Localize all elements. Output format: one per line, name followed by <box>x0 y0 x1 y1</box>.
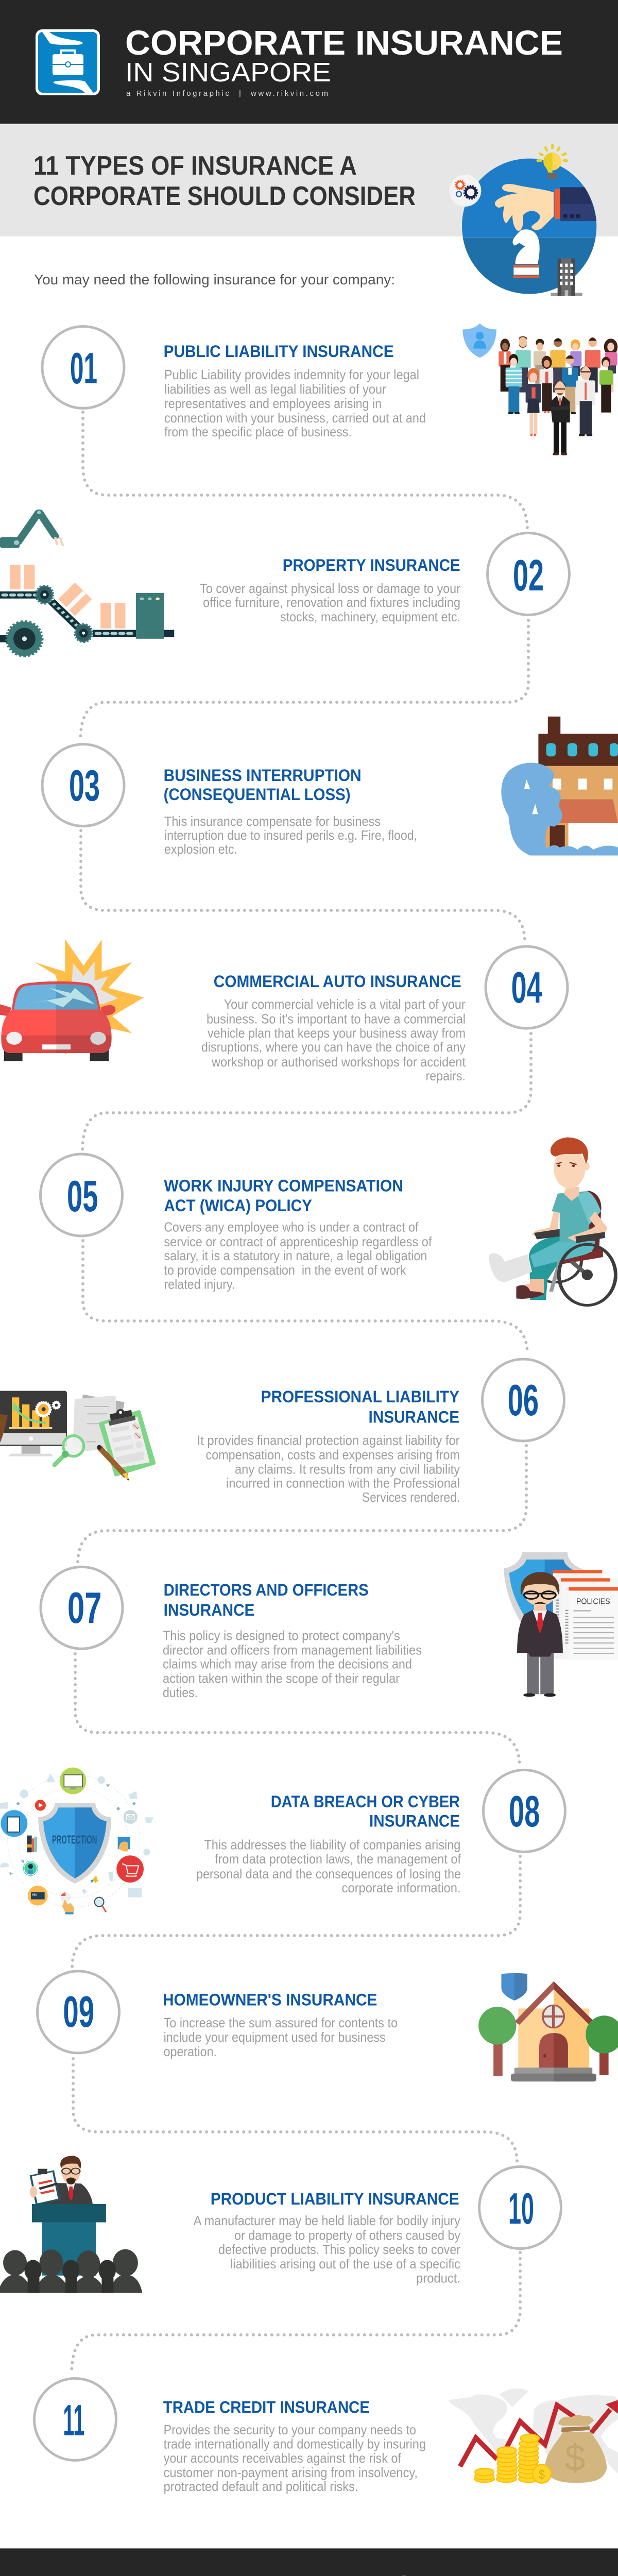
body 07: This policy is designed to protect company's <box>163 1628 400 1643</box>
heading 06 <box>261 1387 459 1426</box>
panel: 01 public liability <box>42 323 617 455</box>
body 11: customer non-payment arising from insolvency, <box>164 2465 418 2480</box>
number badge 08 <box>483 1770 565 1852</box>
body 01 <box>164 367 426 439</box>
body 05: salary, it is a statutory in nature, a legal obligation <box>164 1248 427 1263</box>
heading <box>33 151 416 211</box>
body 05: to provide compensation in the event of work <box>164 1262 406 1278</box>
number badge 09: 09 <box>63 1988 94 2037</box>
body 04: Your commercial vehicle is a vital part of your <box>224 996 466 1012</box>
heading 07: DIRECTORS AND OFFICERS <box>164 1581 369 1599</box>
body 06: It provides financial protection against liability for <box>197 1432 460 1448</box>
body 03 <box>164 814 417 857</box>
heading 01: PUBLIC LIABILITY INSURANCE <box>164 342 394 361</box>
body 08 <box>196 1837 461 1895</box>
icon: logo hands and briefcase <box>36 29 100 95</box>
body 11: protracted default and political risks. <box>164 2479 358 2494</box>
body 06: incurred in connection with the Professional <box>226 1476 460 1491</box>
number badge 07: 07 <box>67 1584 101 1633</box>
gold coins <box>474 2434 551 2483</box>
number badge 02: 02 <box>513 551 544 600</box>
number badge 04 <box>486 946 568 1028</box>
panel: 09 homeowner's <box>37 1971 618 2081</box>
title: IN SINGAPORE <box>125 58 331 88</box>
body 09: operation. <box>164 2044 217 2059</box>
body 06: Services rendered. <box>362 1489 460 1505</box>
cart <box>116 1855 144 1883</box>
heading 11: TRADE CREDIT INSURANCE <box>163 2398 370 2417</box>
hand <box>495 184 554 231</box>
dotted connecting path <box>72 412 531 2375</box>
heading 02: PROPERTY INSURANCE <box>283 556 460 574</box>
number badge 01 <box>42 327 124 408</box>
body 09 <box>164 2015 398 2059</box>
body 04: business. So it's important to have a commercial <box>207 1011 466 1026</box>
body 03: This insurance compensate for business <box>164 814 381 829</box>
body 08: from data protection laws, the management of <box>215 1851 461 1867</box>
body 06: any claims. It results from any civil liability <box>235 1462 460 1477</box>
heading 08 <box>271 1792 460 1830</box>
heading 10: PRODUCT LIABILITY INSURANCE <box>211 2190 459 2208</box>
icon: officer with shield and policies <box>504 1552 618 1697</box>
body 10: product. <box>416 2270 460 2286</box>
body 10: defective products. This policy seeks to cover <box>218 2242 460 2257</box>
body 10: A manufacturer may be held liable for bodily injury <box>194 2213 460 2228</box>
panel: 10 product liability <box>0 2156 561 2293</box>
body 07 <box>163 1628 422 1700</box>
front rows <box>506 354 613 455</box>
number badge 05: 05 <box>67 1172 98 1221</box>
number badge 10 <box>479 2167 561 2248</box>
body 01: Public Liability provides indemnity for your legal <box>164 367 419 382</box>
visa: VISA <box>32 1893 37 1896</box>
body 01: representatives and employees arising in <box>164 396 382 411</box>
body 11: your accounts receivables against the risk of <box>164 2450 402 2466</box>
body 08: This addresses the liability of companies arising <box>204 1837 460 1853</box>
intro text: You may need the following insurance for your company: <box>34 272 395 287</box>
body 04: repairs. <box>425 1068 466 1083</box>
visa <box>28 1886 48 1906</box>
body 10: or damage to property of others caused by <box>234 2227 460 2243</box>
heading 03: BUSINESS INTERRUPTION <box>164 766 362 785</box>
heading 05: ACT (WICA) POLICY <box>164 1196 312 1215</box>
icon: strategy hand with chess knight <box>449 145 596 296</box>
heading 07: INSURANCE <box>164 1601 254 1619</box>
shield <box>38 1803 111 1884</box>
heading 06: PROFESSIONAL LIABILITY <box>261 1387 459 1406</box>
knight <box>512 229 540 264</box>
heading: CORPORATE SHOULD CONSIDER <box>33 181 416 211</box>
body 07: action taken within the scope of their regular <box>163 1670 400 1686</box>
icon: house with shield and trees <box>478 1973 618 2081</box>
panel: 08 data breach <box>0 1768 565 1914</box>
body 11 <box>164 2422 426 2494</box>
icon: protection shield with digital services: PROTECTION <box>52 1833 97 1846</box>
panel: 11 trade credit <box>34 2378 618 2494</box>
number badge 06: 06 <box>508 1376 539 1425</box>
number badge 01: 01 <box>70 344 97 393</box>
icon: crashed red car <box>0 939 144 1061</box>
icon: world map, rising graph and money <box>448 2388 618 2483</box>
number badge 06 <box>482 1359 564 1441</box>
number badge 03 <box>42 744 124 826</box>
heading 07 <box>164 1581 369 1619</box>
heading: 11 TYPES OF INSURANCE A <box>33 151 357 181</box>
body 11: Provides the security to your company needs to <box>164 2422 416 2437</box>
panel: 07 directors and officers <box>41 1552 618 1700</box>
body 02: office furniture, renovation and fixtures including <box>203 595 460 610</box>
heading 03: (CONSEQUENTIAL LOSS) <box>164 785 351 804</box>
monitor <box>60 1768 87 1794</box>
body 11: trade internationally and domestically by insuring <box>164 2436 426 2451</box>
number badge 03: 03 <box>69 761 100 810</box>
gears badge <box>449 175 481 207</box>
tablet <box>1 1810 27 1837</box>
icon: monitor, magnifier and clipboard <box>0 1391 154 1480</box>
body 07: director and officers from management liabilities <box>163 1642 422 1657</box>
body 06 <box>197 1432 460 1505</box>
heading 06: INSURANCE <box>369 1408 459 1426</box>
icon: protection shield with digital services <box>0 1768 153 1914</box>
body 09: include your equipment used for business <box>164 2029 386 2045</box>
body 03: explosion etc. <box>164 841 237 857</box>
body 08: personal data and the consequences of losing the <box>196 1866 461 1882</box>
heading 09: HOMEOWNER'S INSURANCE <box>163 1991 377 2009</box>
heading 03 <box>164 766 362 804</box>
body 02: stocks, machinery, equipment etc. <box>280 609 460 624</box>
money bag <box>545 2415 607 2483</box>
gold coins: $ <box>539 2468 545 2482</box>
body 04 <box>201 996 466 1083</box>
body 02: To cover against physical loss or damage to your <box>200 581 460 596</box>
heading 04: COMMERCIAL AUTO INSURANCE <box>214 972 461 991</box>
building <box>551 259 582 296</box>
heading 08: DATA BREACH OR CYBER <box>271 1792 460 1811</box>
number badge 11 <box>34 2378 116 2461</box>
body 03: interruption due to insured perils e.g. Fire, flood, <box>164 827 417 843</box>
back row <box>499 336 617 393</box>
body 07: claims which may arise from the decisions and <box>163 1656 412 1671</box>
title <box>125 24 563 98</box>
panel: 02 property <box>0 511 570 656</box>
body 10 <box>194 2213 460 2286</box>
bulb <box>538 145 567 179</box>
body 01: liabilities as well as legal liabilities of your <box>164 381 386 397</box>
body 06: compensation, costs and expenses arising from <box>206 1447 460 1463</box>
number badge 05 <box>40 1154 123 1236</box>
body 09: To increase the sum assured for contents to <box>164 2015 398 2030</box>
number badge 08: 08 <box>509 1787 540 1836</box>
body 01: from the specific place of business. <box>164 424 352 439</box>
body 08: corporate information. <box>342 1880 460 1895</box>
panel: 03 business interruption <box>42 717 618 857</box>
heading 08: INSURANCE <box>369 1811 460 1830</box>
number badge 07 <box>41 1567 123 1649</box>
heading 05 <box>164 1177 403 1215</box>
body 10: liabilities arising out of the use of a specific <box>230 2256 460 2272</box>
body 04: disruptions, where you can have the choice of any <box>201 1039 466 1055</box>
body 05: related injury. <box>164 1276 235 1292</box>
panel: 04 commercial auto <box>0 939 568 1083</box>
heading 05: WORK INJURY COMPENSATION <box>164 1177 403 1195</box>
title: CORPORATE INSURANCE <box>125 24 563 62</box>
body 04: vehicle plan that keeps your business away from <box>208 1025 466 1041</box>
header band <box>0 0 618 124</box>
number badge 11: 11 <box>63 2396 84 2445</box>
body 07: duties. <box>163 1685 198 1700</box>
number badge 09 <box>37 1971 119 2053</box>
body 04: workshop or authorised workshops for accident <box>211 1054 466 1070</box>
call to action panel <box>0 2548 618 2576</box>
number badge 04: 04 <box>511 963 542 1012</box>
number badge 02 <box>487 533 570 615</box>
icon: crowd of employees with shield <box>462 323 617 455</box>
icon: man in wheelchair <box>489 1138 615 1306</box>
panel: 05 WICA <box>40 1138 615 1306</box>
sleeve <box>555 189 560 219</box>
icon: speaker at podium with audience <box>0 2156 142 2293</box>
body 01: connection with your business, carried out at and <box>164 410 426 426</box>
body 05: service or contract of apprenticeship regardless of <box>164 1234 432 1249</box>
subtitle band <box>0 124 618 236</box>
body 05: Covers any employee who is under a contract of <box>164 1219 419 1235</box>
body 02 <box>200 581 460 624</box>
icon: factory conveyor <box>0 511 174 656</box>
panel: 06 professional liability <box>0 1359 564 1505</box>
number badge 10: 10 <box>508 2184 534 2233</box>
body 05 <box>164 1219 432 1292</box>
title: a Rikvin Infographic | www.rikvin.com <box>126 89 328 98</box>
money bag: $ <box>565 2437 586 2479</box>
icon: flooded building <box>501 717 618 856</box>
